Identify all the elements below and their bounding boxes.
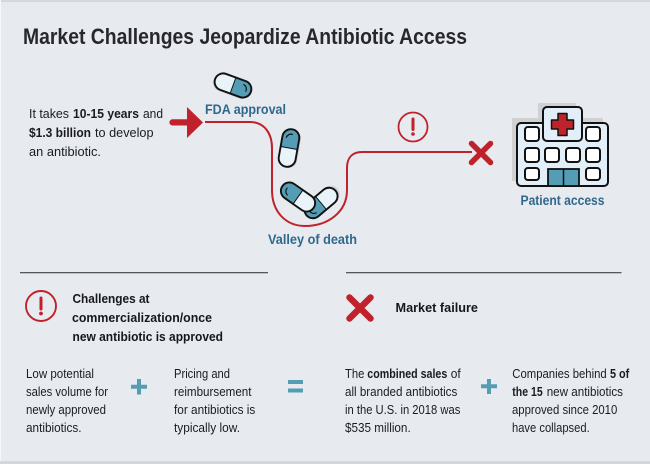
icon: alert for challenges	[26, 291, 56, 321]
text block: combined sales: of	[451, 367, 461, 381]
text block: collapsed companies: approved since 2010	[512, 403, 617, 417]
text block: pricing: Pricing and	[174, 367, 230, 381]
icon: capsule at FDA approval	[211, 71, 254, 101]
text block: time and cost: an antibiotic.	[29, 145, 101, 159]
text block: pricing: typically low.	[174, 421, 240, 435]
text block: time and cost: and	[143, 107, 163, 121]
text block: combined sales: all branded antibiotics	[345, 385, 457, 399]
text block: time and cost	[29, 107, 163, 159]
heading: challenges: new antibiotic is approved	[72, 329, 223, 344]
icon: alert on pathway	[398, 112, 428, 142]
icon: equals	[288, 380, 303, 392]
text block: low sales volume: sales volume for	[26, 385, 108, 399]
text block: combined sales: in the U.S. in 2018 was	[345, 403, 460, 417]
text block: collapsed companies: the 15	[512, 385, 543, 399]
text block: collapsed companies: 5 of	[610, 367, 630, 381]
icon: red X on pathway	[472, 144, 490, 162]
heading: challenges: Challenges at	[72, 291, 150, 306]
icon: hospital	[512, 103, 608, 186]
text block: pricing	[174, 367, 255, 435]
label: FDA approval: FDA approval	[205, 102, 286, 117]
text block: pricing: for antibiotics is	[174, 403, 255, 417]
text block: combined sales: combined sales	[367, 367, 447, 381]
icon: red X for market failure	[350, 298, 370, 318]
icon: plus	[481, 379, 497, 394]
text block: low sales volume: Low potential	[26, 367, 94, 381]
pathway curve: valley of death	[205, 122, 472, 226]
text block: pricing: reimbursement	[174, 385, 252, 399]
text block: combined sales: The	[345, 367, 364, 381]
heading: challenges	[72, 291, 223, 344]
heading: challenges: commercialization/once	[72, 310, 212, 325]
text block: low sales volume	[26, 367, 108, 435]
text block: time and cost: It takes	[29, 107, 69, 121]
icon: plus	[131, 379, 147, 394]
text block: low sales volume: antibiotics.	[26, 421, 82, 435]
text block: combined sales: $535 million.	[345, 421, 411, 435]
text block: low sales volume: newly approved	[26, 403, 106, 417]
text block: time and cost: to develop	[95, 126, 154, 140]
label: Patient access: Patient access	[520, 193, 604, 208]
text block: collapsed companies: new antibiotics	[547, 385, 623, 399]
title: Market Challenges Jeopardize Antibiotic Access	[23, 24, 467, 49]
icon: capsules in valley	[278, 179, 343, 222]
heading: market failure: Market failure	[396, 300, 478, 315]
label: Valley of death: Valley of death	[268, 232, 357, 247]
text block: collapsed companies: have collapsed.	[512, 421, 590, 435]
text block: time and cost: 10-15 years	[73, 107, 139, 121]
text block: time and cost: $1.3 billion	[29, 126, 91, 140]
rule: right section	[346, 272, 622, 273]
icon: falling capsule	[277, 128, 302, 169]
text block: collapsed companies	[512, 367, 630, 435]
text block: combined sales	[345, 367, 461, 435]
text block: collapsed companies: Companies behind	[512, 367, 607, 381]
arrow: start of pathway	[169, 107, 203, 138]
rule: left section	[20, 272, 268, 273]
